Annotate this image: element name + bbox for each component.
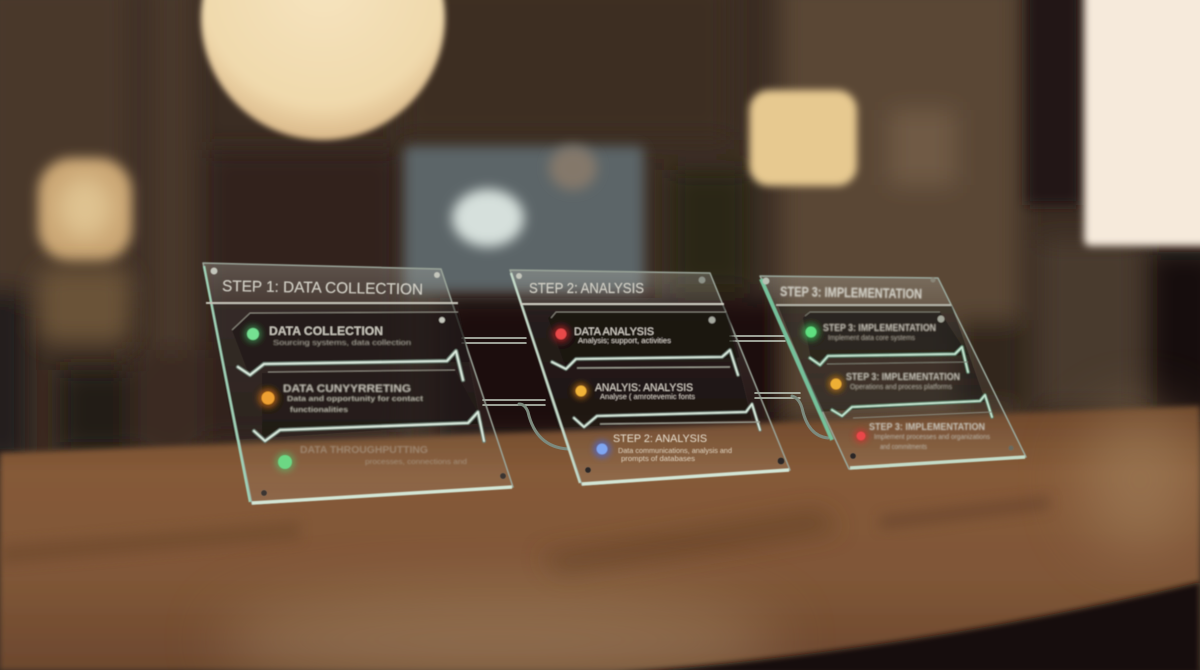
panel 1 card row 1: DATA COLLECTION bbox=[269, 326, 383, 338]
panel 1 card row 3 bbox=[275, 444, 467, 472]
connector pipes bbox=[462, 336, 828, 449]
panel 2 screws bbox=[516, 273, 784, 473]
panel 3 card row 2: Operations and process platforms bbox=[850, 382, 952, 391]
panel 1 card row 1 bbox=[232, 312, 470, 380]
panel 1 card row 2 bbox=[254, 370, 484, 441]
panel 2 card row 3: prompts of databases bbox=[621, 454, 695, 463]
panel 2 card row 2: Analyse ( amrotevemic fonts bbox=[600, 392, 695, 401]
panel 3 lower tint bbox=[778, 306, 986, 412]
panel 2 heading: STEP 2: ANALYSIS bbox=[529, 280, 644, 297]
panel 3 card row 3: Implement processes and organizations bbox=[874, 432, 990, 441]
panel 1 card row 2: Data and opportunity for contact bbox=[287, 394, 424, 403]
panel 1 green glass edge bbox=[204, 266, 250, 502]
globe lamp bbox=[201, 0, 445, 140]
panel 2 card row 3: Data communications, analysis and bbox=[618, 446, 732, 455]
panel 3 green glass edge bbox=[761, 279, 832, 440]
table front edge bbox=[612, 582, 1200, 670]
center right lamp bbox=[749, 90, 857, 186]
panel 1 screws bbox=[210, 268, 506, 496]
panel 2 card row 3: STEP 2: ANALYSIS bbox=[613, 433, 707, 445]
panel 1 card row 2: DATA CUNYYRRETING bbox=[283, 383, 411, 395]
panel 3 card row 1: STEP 3: IMPLEMENTATION bbox=[823, 323, 936, 334]
panel 2 card row 1: DATA ANALYSIS bbox=[574, 326, 654, 338]
panel 2 card row 1 bbox=[548, 312, 740, 375]
panel 3: implementation bbox=[760, 276, 1026, 469]
panel 2 lower tint bbox=[522, 304, 752, 428]
panel 2 card row 1: Analysis; support, activities bbox=[578, 336, 671, 345]
panel 2: analysis bbox=[510, 270, 790, 485]
panel 1 lower tint bbox=[210, 304, 481, 440]
wall panels and dark areas bbox=[0, 0, 1200, 460]
panel 3 heading: STEP 3: IMPLEMENTATION bbox=[780, 284, 922, 301]
panel 2 card row 2: ANALYIS: ANALYSIS bbox=[595, 382, 693, 394]
panel 3 card row 1 bbox=[802, 312, 968, 372]
panel 1: data collection bbox=[203, 263, 513, 504]
screen glow bbox=[404, 146, 644, 292]
panel 3 card row 3 bbox=[854, 422, 990, 451]
panel 1 card row 3: DATA THROUGHPUTTING bbox=[300, 444, 428, 456]
bright window bbox=[1084, 0, 1200, 246]
panel 3 card row 3: and commitments bbox=[880, 442, 927, 451]
panel 2 glass edge bbox=[511, 273, 580, 483]
left lamp bbox=[38, 158, 132, 262]
panel 1 bottom edge bbox=[252, 487, 512, 503]
panel 3 card row 2 bbox=[828, 372, 992, 418]
panel 1 card row 1: Sourcing systems, data collection bbox=[273, 338, 411, 347]
panel 2 bottom edge bbox=[582, 470, 789, 484]
panel 3 divider bbox=[776, 304, 951, 306]
panel 3 screws bbox=[762, 278, 1014, 459]
panel 3 bottom edge bbox=[850, 457, 1025, 468]
panel 2 card row 2 bbox=[573, 382, 760, 430]
panel 3 card row 2: STEP 3: IMPLEMENTATION bbox=[846, 372, 960, 383]
panel 2 divider bbox=[520, 303, 724, 305]
panel 1 card row 2: functionalities bbox=[290, 405, 348, 414]
panel 1 heading: STEP 1: DATA COLLECTION bbox=[222, 278, 423, 299]
panel 3 card row 1: Implement data core systems bbox=[828, 333, 915, 342]
panel 1 card row 3: processes, connections and bbox=[365, 457, 467, 466]
wooden table bbox=[0, 406, 1200, 670]
panel 3 card row 3: STEP 3: IMPLEMENTATION bbox=[869, 422, 985, 433]
panel 1 divider bbox=[206, 302, 458, 304]
panel 2 card row 3 bbox=[593, 433, 732, 463]
wood grain and reflections bbox=[0, 410, 1200, 670]
